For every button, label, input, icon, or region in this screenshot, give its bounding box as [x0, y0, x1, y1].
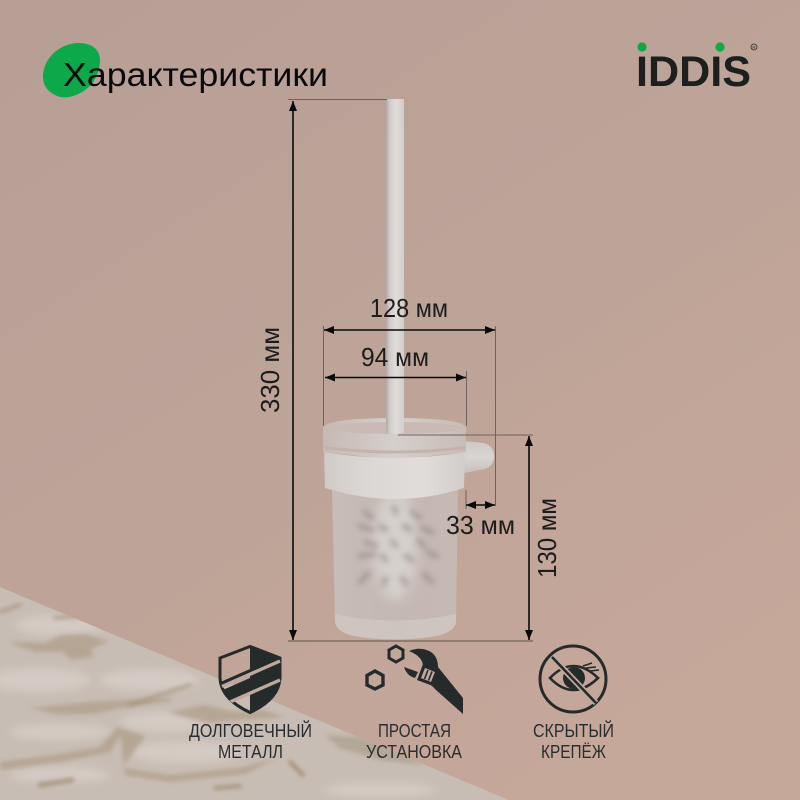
handle rod [386, 99, 404, 434]
icon: shield [218, 644, 282, 714]
frosted glass cup [330, 490, 460, 645]
dimension: 33 mm mount depth: 33 мм [446, 510, 515, 540]
caption: durable metal: МЕТАЛЛ [218, 742, 283, 762]
icon: crossed eye [540, 646, 606, 712]
dimension: 130 mm cup height: 130 мм [532, 498, 562, 578]
icon: nuts and wrench [367, 646, 463, 714]
dimension: 128 mm width: 128 мм [370, 293, 448, 323]
product: toilet brush with glass holder [323, 99, 494, 645]
marble countertop [0, 587, 509, 800]
dimension: 94 mm width: 94 мм [361, 342, 429, 372]
white holder band [324, 452, 465, 499]
caption: hidden mount: СКРЫТЫЙ [533, 720, 614, 741]
caption: simple installation: УСТАНОВКА [366, 742, 462, 762]
dimension: 33 mm mount depth [446, 490, 515, 540]
caption: durable metal: ДОЛГОВЕЧНЫЙ [189, 720, 312, 741]
caption: hidden mount: КРЕПЁЖ [541, 742, 606, 762]
caption: simple installation: ПРОСТАЯ [378, 721, 451, 741]
cup rim [323, 418, 466, 460]
green blob [43, 43, 100, 97]
title: Характеристики [63, 56, 328, 93]
wall mount [464, 441, 494, 473]
logo: IDDIS: R [752, 45, 756, 50]
logo: IDDIS: IDDIS [636, 48, 751, 96]
dimension: 330 mm height: 330 мм [255, 327, 285, 413]
